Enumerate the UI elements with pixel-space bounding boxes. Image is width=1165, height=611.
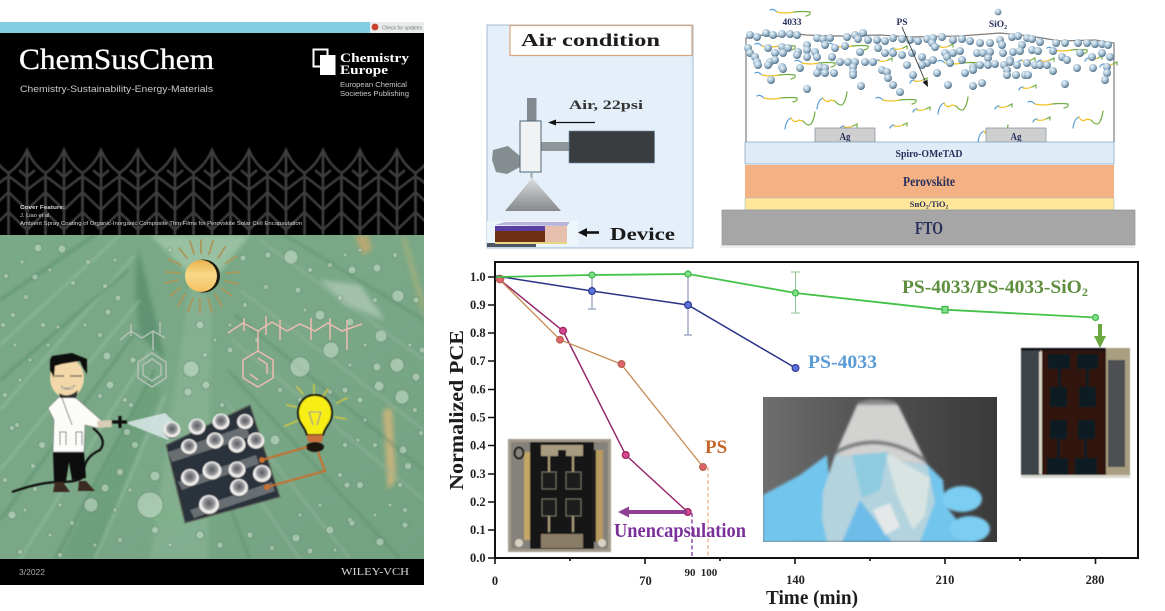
publisher logo: Chemistry: [340, 50, 410, 65]
cover feature text: [20, 205, 302, 227]
layer: SnO2/TiO2: 2: [945, 204, 948, 210]
label 4033: 4033: [782, 18, 802, 28]
silver electrode right: Ag: [1010, 131, 1022, 143]
x axis labels: [492, 567, 1104, 588]
axis ticks: [488, 277, 1096, 564]
label: PS: PS: [705, 437, 727, 458]
heading box: [510, 26, 692, 56]
spray cone: [505, 178, 561, 211]
cover feature text: Cover Feature:: [20, 205, 65, 211]
x axis labels: 210: [936, 573, 954, 587]
y axis labels: 0.8: [470, 326, 486, 340]
drop lines: [692, 467, 708, 558]
chemical structure: grey polymer: [120, 322, 166, 387]
silver electrode right: [986, 128, 1046, 143]
y axis labels: 0.5: [470, 410, 486, 424]
y axis labels: 1.0: [470, 270, 486, 284]
layer: FTO: [722, 210, 1135, 245]
cover feature text: J. Liao et al.: [20, 213, 51, 219]
publisher logo: European Chemical: [340, 82, 407, 89]
x axis labels: 100: [701, 567, 718, 579]
check for updates badge: [370, 22, 424, 33]
heading box: Air condition: [521, 30, 660, 50]
spray cone: [128, 413, 178, 440]
x axis labels: 140: [786, 573, 805, 587]
x axis title: Time (min): [766, 587, 858, 609]
layer: SnO2/TiO2: 2: [926, 204, 929, 210]
publisher logo: Europe: [340, 62, 388, 77]
black masthead: [0, 33, 424, 235]
x axis labels: 70: [639, 574, 652, 588]
cover top strip: [0, 22, 424, 33]
label SiO2: 2: [1004, 25, 1007, 31]
y axis labels: 0.7: [470, 354, 486, 368]
issue number: 3/2022: [19, 567, 45, 577]
illustration: scientist spraying: [12, 353, 178, 492]
top polymer fragment: [770, 9, 810, 16]
y axis labels: 0.6: [470, 382, 486, 396]
leaf photograph: [0, 235, 425, 560]
y axis labels: 0.1: [470, 523, 486, 537]
y axis title: Normalized PCE: [446, 330, 468, 490]
layer: Spiro-OMeTAD: Spiro-OMeTAD: [896, 149, 963, 160]
label: Unencapsulation: Unencapsulation: [614, 520, 746, 542]
panel: journal cover: [0, 22, 452, 585]
polymer chains: [755, 43, 1117, 142]
y axis labels: 0.0: [470, 551, 486, 565]
cover feature text: Ambient Spray Coating of Organic-Inorganic Composite Thin Films for Perovskite Solar Cell Encapsulation: [20, 221, 302, 227]
icon: light bulb: [285, 385, 347, 452]
y axis labels: 0.2: [470, 495, 486, 509]
journal subtitle: Chemistry-Sustainability-Energy-Materials: [20, 84, 213, 95]
label PS: PS: [896, 18, 908, 28]
air arrow: [548, 120, 595, 126]
device arrow: [578, 228, 599, 237]
label: PS-4033/PS-4033-SiO2: 2: [1082, 285, 1088, 299]
chemical structure: pink polymer: [228, 316, 362, 387]
series: unencapsulated: [499, 279, 691, 515]
panel: normalized PCE line chart: [446, 262, 1138, 609]
device stack: [487, 221, 578, 247]
silver electrode left: Ag: [840, 131, 851, 143]
y axis labels: 0.9: [470, 298, 486, 312]
cover footer: [0, 559, 424, 585]
air pressure label: Air, 22psi: [569, 97, 644, 112]
green arrow: [1094, 324, 1106, 348]
orange wires: [259, 447, 325, 490]
layer: SnO2/TiO2: [745, 198, 1114, 210]
panel: device stack schematic: [720, 9, 1135, 248]
x axis labels: 90: [684, 567, 696, 579]
leaf veins and shading: [60, 235, 424, 560]
y axis labels: 0.3: [470, 467, 486, 481]
check for updates badge: Check for updates: [382, 26, 422, 32]
layer: Perovskite: Perovskite: [903, 175, 955, 190]
series: PS-4033: [496, 276, 799, 371]
label SiO2: SiO: [989, 20, 1004, 30]
publisher name: WILEY-VCH: [341, 567, 409, 578]
purple arrow: [618, 506, 687, 518]
layer: SnO2/TiO2: /TiO: [928, 199, 946, 209]
photo: unencapsulated device: [508, 439, 611, 552]
layer: Perovskite: [745, 165, 1114, 198]
error bars: [588, 272, 800, 335]
photo: encapsulated device after aging: [1021, 348, 1130, 478]
illustration: encapsulated device: [164, 405, 280, 523]
icon: sun: [165, 240, 240, 313]
y axis labels: [470, 270, 486, 565]
layer: SnO2/TiO2: SnO: [910, 199, 926, 209]
x axis labels: 0: [492, 574, 498, 588]
layer: FTO: FTO: [915, 218, 943, 238]
journal title: ChemSusChem: [19, 43, 214, 76]
plot frame: [495, 262, 1138, 558]
leaf pattern band: [0, 150, 452, 235]
layer: Spiro-OMeTAD: [745, 142, 1114, 164]
label: PS-4033: PS-4033: [808, 352, 877, 373]
encapsulation layer walls: [746, 33, 1114, 142]
y axis labels: 0.4: [470, 438, 486, 452]
photo: flexible encapsulation film on glove: [763, 397, 997, 542]
water droplets: [0, 244, 425, 558]
spray gun: [492, 98, 654, 178]
PS pointer arrow: [902, 27, 928, 87]
panel: air condition spray setup: [487, 25, 693, 248]
label: PS-4033/PS-4033-SiO2: PS-4033/PS-4033-SiO: [902, 277, 1077, 298]
device label: Device: [610, 224, 675, 244]
series: PS: [496, 275, 706, 470]
publisher logo: Societies Publishing: [340, 91, 409, 98]
series: PS-4033/PS-4033-SiO2: [496, 271, 1098, 320]
x axis labels: 280: [1086, 573, 1104, 587]
publisher logo: [314, 50, 410, 98]
silver electrode left: [815, 128, 875, 143]
silica spheres: [744, 9, 1114, 96]
